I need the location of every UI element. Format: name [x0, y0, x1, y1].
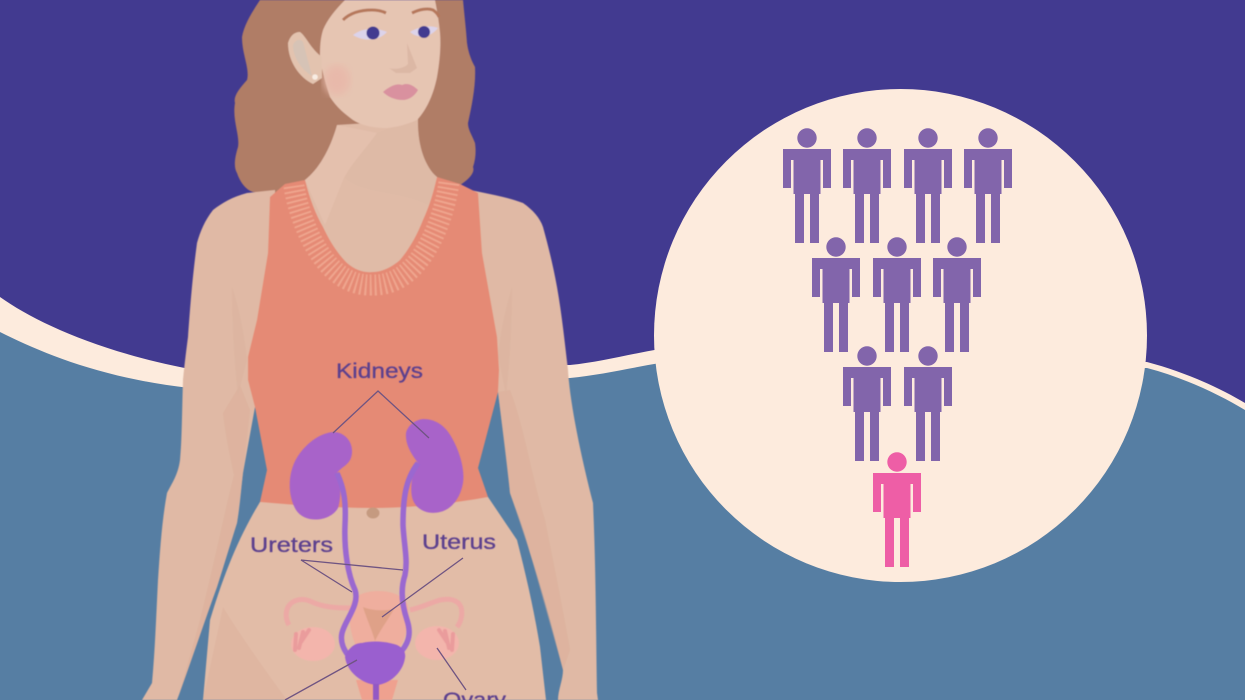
- neck and chest: [305, 120, 437, 272]
- cheek blush: [324, 65, 350, 95]
- left arm and shoulder: [142, 190, 275, 700]
- icon: purple person row 3: [843, 346, 891, 461]
- lips: [383, 84, 418, 100]
- armpit shading right: [498, 287, 512, 395]
- icon: purple person row 2: [873, 237, 921, 352]
- kidney left: [290, 432, 352, 520]
- reproductive organs: [286, 591, 462, 700]
- face: [320, 0, 440, 128]
- label: Ureters: Ureters: [250, 534, 333, 557]
- bladder: [345, 642, 405, 685]
- ovary left: [291, 627, 335, 661]
- uterus cavity: [363, 607, 394, 641]
- eyebrows: [343, 9, 439, 20]
- ureter left: [337, 473, 356, 655]
- background: teal wave: [0, 332, 1245, 700]
- hips: [203, 497, 546, 700]
- left arm shading: [178, 385, 250, 698]
- illustration: woman: [142, 0, 598, 700]
- tank top: [248, 177, 499, 508]
- icon: purple person row 1: [783, 128, 831, 243]
- icon: purple person row 1: [964, 128, 1012, 243]
- background: cream wave: [0, 297, 1245, 700]
- lower canal: [356, 680, 398, 700]
- neckline ribbing: [294, 182, 449, 285]
- earring: [312, 74, 318, 80]
- label: Uterus: Uterus: [422, 531, 496, 554]
- icon: purple person row 3: [904, 346, 952, 461]
- right eye white: [410, 26, 438, 37]
- panel: statistic circle: [654, 89, 1147, 582]
- icon: purple person row 1: [843, 128, 891, 243]
- left iris: [366, 26, 380, 40]
- icon: purple person row 2: [812, 237, 860, 352]
- hair: [234, 0, 476, 195]
- urinary system: [290, 419, 463, 700]
- icon: purple person row 1: [904, 128, 952, 243]
- neck shadow: [345, 118, 437, 205]
- urethra: [373, 684, 379, 700]
- uterus: [349, 591, 408, 650]
- eyes: [353, 26, 438, 40]
- inner ear: [293, 40, 312, 76]
- left neck light: [305, 125, 377, 225]
- navel: [366, 508, 380, 518]
- kidney right: [406, 419, 463, 513]
- label: Kidneys: Kidneys: [336, 360, 423, 383]
- ureter right: [398, 463, 418, 655]
- right iris: [418, 26, 430, 38]
- labels and leader lines: [250, 360, 507, 700]
- ovary right: [415, 626, 459, 660]
- nose shadow: [389, 43, 417, 73]
- groin shading: [203, 607, 287, 700]
- leader lines: [285, 391, 466, 700]
- icon: pink highlighted person: [873, 452, 921, 567]
- right arm and shoulder: [470, 190, 598, 700]
- right arm shading: [498, 390, 570, 670]
- icon group: people statistic: [783, 128, 1012, 567]
- fallopian tubes: [286, 599, 462, 627]
- icon: purple person row 2: [933, 237, 981, 352]
- left eye white: [353, 29, 387, 40]
- ear: [288, 32, 322, 84]
- armpit shading left: [232, 287, 247, 395]
- fimbriae: [295, 630, 453, 650]
